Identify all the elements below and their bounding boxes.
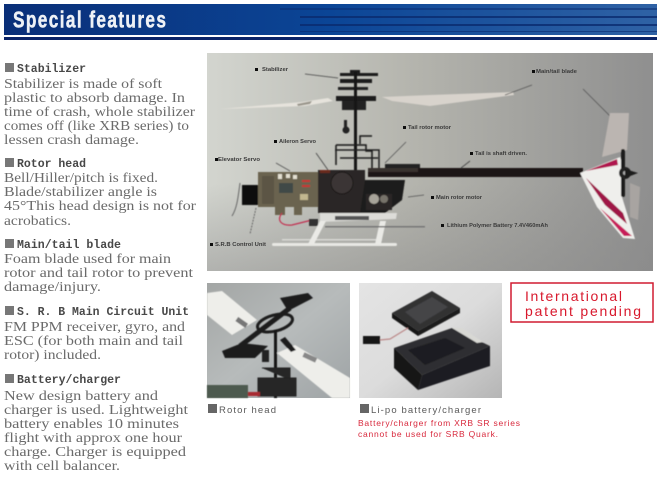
caption: Li-po battery/charger: Li-po battery/charger (371, 405, 481, 416)
callout labels: Stabilizer (262, 67, 289, 73)
callout labels: Aileron Servo (279, 139, 317, 145)
callout: international patent pending: patent pending (525, 303, 641, 319)
text block: stabilizer (4, 62, 196, 147)
text block: rotor head (4, 157, 197, 228)
text block: main/tail blade: Main/tail blade (17, 238, 121, 252)
text block: battery/charger: Battery/charger (17, 373, 121, 387)
text block: S.R.B main circuit unit (4, 305, 189, 362)
callout labels: Main/tail blade (536, 69, 577, 75)
text block: rotor head: Bell/Hiller/pitch is fixed. (4, 170, 158, 185)
callout labels: Elevator Servo (218, 157, 261, 163)
callout labels: Tail rotor motor (408, 125, 452, 131)
text block: battery/charger: battery enables 10 minutes (4, 416, 179, 431)
text block: S.R.B main circuit unit: rotor) included. (4, 347, 101, 362)
callout labels: Tail is shaft driven. (475, 151, 527, 157)
text block: battery/charger: New design battery and (4, 388, 158, 403)
helicopter illustration (220, 70, 640, 246)
text block: stabilizer: lessen crash damage. (4, 132, 139, 147)
photo: Li-po battery and charger (359, 283, 502, 398)
SRB control unit (258, 172, 318, 207)
text block: battery/charger (4, 373, 188, 473)
text block: S.R.B main circuit unit: FM PPM receiver, gyro, and (4, 319, 185, 334)
title banner (4, 4, 657, 40)
callout labels: Main rotor motor (436, 195, 483, 201)
warning note: Battery/charger from XRB SR series (358, 418, 520, 428)
text block: S.R.B main circuit unit: ESC (for both main and tail (4, 333, 183, 348)
landing skids (272, 243, 397, 246)
text block: battery/charger: charge. Charger is equipped (4, 444, 186, 459)
tail assembly (602, 113, 629, 157)
main frame (318, 170, 365, 213)
text block: main/tail blade: damage/injury. (4, 279, 101, 294)
caption: rotor head: Rotor head (219, 405, 276, 416)
warning note (358, 418, 520, 439)
text block: stabilizer: Stabilizer is made of soft (4, 76, 162, 91)
text block: battery/charger: flight with approx one hour (4, 430, 183, 445)
text block: stabilizer: comes off (like XRB series) to (4, 118, 189, 133)
text block: rotor head: 45°This head design is not for (4, 198, 197, 213)
tail boom (368, 168, 583, 177)
panel: helicopter diagram (207, 53, 653, 271)
text block: battery/charger: charger is used. Lightweight (4, 402, 188, 417)
text block: rotor head: Rotor head (17, 157, 86, 171)
text block: rotor head: acrobatics. (4, 213, 71, 228)
text block: main/tail blade: rotor and tail rotor to prevent (4, 265, 193, 280)
photo: rotor head (207, 283, 350, 398)
text block: battery/charger: with cell balancer. (4, 458, 120, 473)
callout labels (210, 67, 577, 248)
callout labels: Lithium Polymer Battery 7.4V460mAh (447, 223, 549, 229)
text block: stabilizer: plastic to absorb damage. In (4, 90, 185, 105)
text block: main/tail blade: Foam blade used for main (4, 251, 171, 266)
text block: rotor head: Blade/stabilizer angle is (4, 184, 157, 199)
text block: main/tail blade (4, 238, 193, 294)
title text: Special features (13, 8, 166, 33)
text block: S.R.B main circuit unit: S. R. B Main Circuit Unit (17, 305, 189, 319)
callout: international patent pending: International (525, 288, 622, 304)
text block: stabilizer: Stabilizer (17, 62, 86, 76)
callout labels: S.R.B Control Unit (215, 242, 266, 248)
text block: stabilizer: time of crash, whole stabilizer (4, 104, 196, 119)
warning note: cannot be used for SRB Quark. (358, 429, 498, 439)
callout: international patent pending (511, 283, 653, 322)
